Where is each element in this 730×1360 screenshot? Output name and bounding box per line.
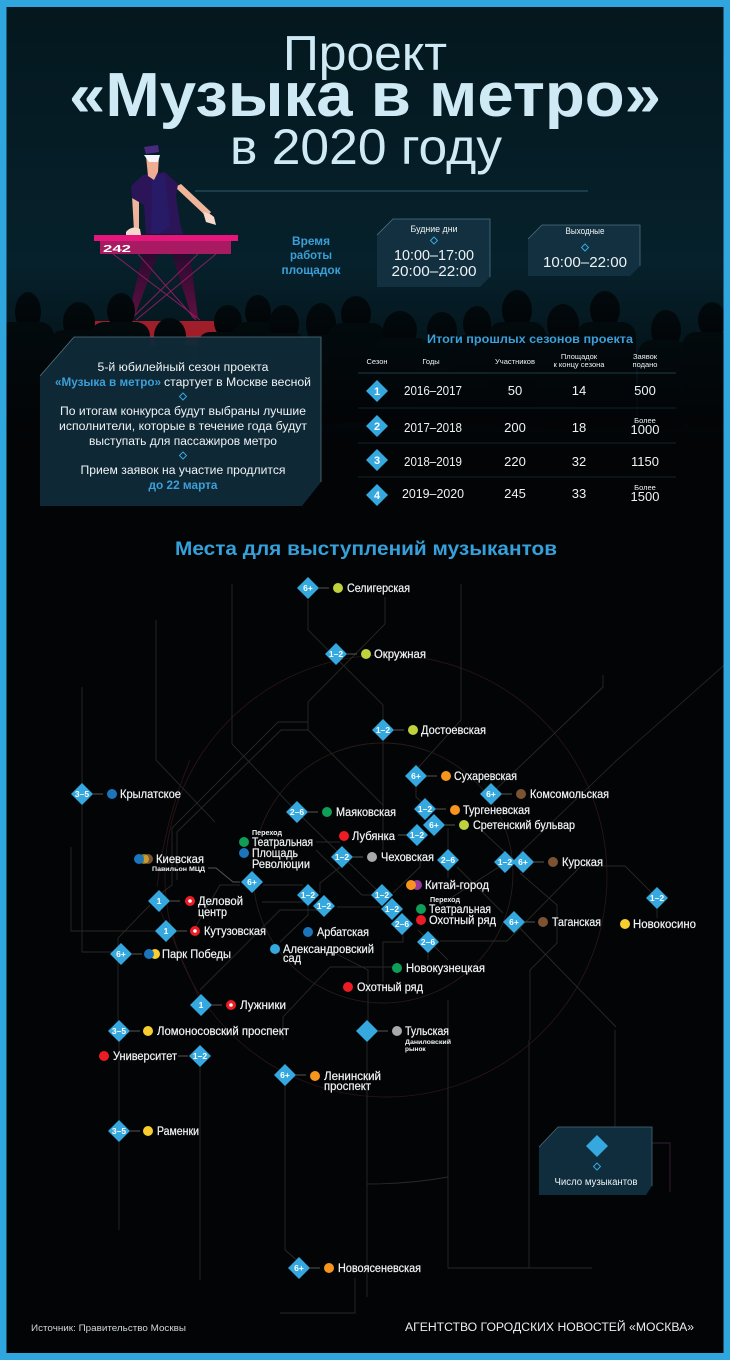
table row 1 [366,380,656,402]
station: Тульская [356,1020,451,1053]
station: Новокузнецкая: 2–6 [421,937,435,947]
station: Парк Победы: 6+ [116,949,126,959]
station: Арбатская: 1–2 [301,890,315,900]
station: Тульская: Тульская [405,1026,449,1038]
metro map background lines [71,584,730,1313]
station: Чеховская: Чеховская [381,852,434,864]
station: Сухаревская: 6+ [411,771,421,781]
table row 2: 2 [374,421,380,433]
station: Киевская: Павильон МЦД [152,866,205,873]
station: Маяковская [286,801,396,823]
panel: project description: исполнители, которые в течение года будут [59,421,308,433]
table row 3: 220 [504,454,526,469]
station: Лубянка [339,824,428,846]
station: Селигерская: Селигерская [347,583,410,595]
station: Комсомольская: 6+ [486,789,496,799]
panel: project description: 5-й юбилейный сезон проекта [98,362,269,374]
station: Ленинский проспект [274,1064,381,1093]
station: Крылатское: 3–5 [75,789,89,799]
heading: venues: Места для выступлений музыкантов [175,538,557,560]
panel: project description: выступать для пассажиров метро [89,436,277,448]
table row 2: Более [634,416,656,425]
legend panel: number of musicians [539,1127,652,1195]
station: Тульская: Даниловский [405,1038,451,1046]
table column headers: подано [633,360,657,369]
station: Парк Победы [110,943,231,965]
table row 2: 200 [504,420,526,435]
station: Университет: Университет [113,1051,178,1063]
station: Кутузовская: Кутузовская [204,926,266,938]
station: Театральная / Охотный ряд (east group): 1–2 [375,890,389,900]
station: Ломоносовский проспект: 3–5 [112,1026,126,1036]
station: Тургеневская [414,798,530,820]
station: Деловой центр: 1 [157,896,162,906]
table column headers: Площадок [561,352,598,361]
table row 4: 245 [504,486,526,501]
station: Курская: Курская [562,857,603,869]
station: Окружная: Окружная [374,649,426,661]
table heading: Итоги прошлых сезонов проекта [427,334,634,346]
table column headers: Заявок [633,352,658,361]
panel: project description: «Музыка в метро» [55,377,161,389]
title: Проект [283,27,447,81]
station: Новоясеневская: Новоясеневская [338,1263,421,1275]
source: Источник: Правительство Москвы [31,1323,186,1334]
station: Достоевская: 1–2 [376,725,390,735]
station: Крылатское: Крылатское [120,789,181,801]
station: Маяковская: Маяковская [336,807,396,819]
panel: weekdays hours [377,219,490,287]
table column headers: Участников [495,357,535,366]
title: в 2020 году [230,119,502,175]
station: Раменки: 3–5 [112,1126,126,1136]
station: Университет [99,1045,211,1067]
station: Театральная / Площадь Революции: Переход [252,830,283,837]
station: Кутузовская [155,920,266,942]
station: Александровский сад [270,944,374,965]
station: Селигерская [297,577,410,599]
station: Театральная / Охотный ряд (east group): Переход [430,897,461,904]
table row 4: 33 [572,486,586,501]
station: Китай-город: 2–6 [441,855,455,865]
table row 4: 1500 [631,489,659,504]
table row 2 [366,415,659,437]
station: Китай-город [406,849,489,892]
station: Театральная / Площадь Революции [239,830,313,871]
panel: project description: По итогам конкурса будут выбраны лучшие [60,406,306,418]
table row 1: 50 [508,383,522,398]
table row 3: 2018–2019 [404,454,462,469]
table column headers: к концу сезона [554,360,605,369]
station: Таганская: 6+ [509,917,519,927]
station: Курская: 6+ [518,857,528,867]
table row 2: 2017–2018 [404,420,462,435]
station: Сретенский бульвар: 6+ [429,820,439,830]
table row 1: 14 [572,383,586,398]
agency credit: АГЕНТСТВО ГОРОДСКИХ НОВОСТЕЙ «МОСКВА» [405,1321,694,1334]
station: Новокузнецкая: Новокузнецкая [406,963,485,975]
panel: weekdays hours: Будние дни [410,224,458,235]
table row 4: 4 [374,490,381,502]
station: Тургеневская: Тургеневская [463,805,530,817]
station: Таганская [503,911,601,933]
station: Крылатское [71,783,181,805]
station: Театральная / Площадь Революции: Революции [252,859,310,871]
station: Окружная [325,643,426,665]
station: Курская [494,851,603,873]
station: Лужники [190,994,286,1016]
illustration: musician at keyboard: 242 [103,244,132,255]
illustration: stage [90,321,252,345]
working hours label: работы [290,250,332,262]
station: Ломоносовский проспект: Ломоносовский проспект [157,1026,290,1038]
station: Курская: 1–2 [498,857,512,867]
working hours label [282,236,341,277]
table row 1: 2016–2017 [404,383,462,398]
legend panel: number of musicians: Число музыкантов [554,1177,638,1188]
panel: weekend hours [528,225,640,276]
table row 1: 1 [374,386,380,398]
panel: project description [40,337,321,506]
title: «Музыка в метро» [69,61,661,130]
station: Киевская: Киевская [156,854,204,866]
table row 2: 18 [572,420,586,435]
station: Новокузнецкая [392,931,485,975]
station: Театральная / Охотный ряд (east group): Театральная [429,904,491,916]
station: Тульская: рынок [405,1046,426,1053]
station: Сухаревская [405,765,517,787]
station: Киевская: 6+ [247,877,257,887]
table row 3: 32 [572,454,586,469]
panel: project description: до 22 марта [148,480,218,492]
table row 3 [366,449,659,471]
station: Комсомольская [480,783,609,805]
station: Александровский сад: Александровский [283,944,374,956]
station: Сухаревская: Сухаревская [454,771,517,783]
table row 4 [366,483,659,506]
station: Киевская [134,854,263,893]
working hours label: Время [292,236,330,248]
table column headers: Сезон [366,357,388,366]
table: past seasons [358,334,676,506]
station: Арбатская: Арбатская [317,927,369,939]
station: Новокосино [620,887,696,931]
station: Раменки [108,1120,199,1142]
station: Новоясеневская [288,1257,421,1279]
station: Таганская: Таганская [552,917,601,929]
station: Театральная / Охотный ряд (east group): Охотный ряд [429,915,496,927]
station: Раменки: Раменки [157,1126,199,1138]
station: Театральная / Площадь Революции: Театральная [252,837,313,849]
panel: project description: Прием заявок на участие продлится [80,465,286,477]
station: Новокосино: Новокосино [633,919,696,931]
panel: weekdays hours: 10:00–17:00 [394,248,474,264]
station: Селигерская: 6+ [303,583,313,593]
station: Ломоносовский проспект [108,1020,290,1042]
station: Университет: 1–2 [193,1051,207,1061]
station: Тургеневская: 1–2 [418,804,432,814]
station: Лужники: 1 [199,1000,204,1010]
station: Новоясеневская: 6+ [294,1263,304,1273]
panel: project description: стартует в Москве весной [164,377,311,389]
station: Лубянка: 1–2 [410,830,424,840]
station: Чеховская: 1–2 [335,852,349,862]
station: Деловой центр [148,890,243,919]
panel: weekend hours: 10:00–22:00 [543,255,627,271]
table row 1: 500 [634,383,656,398]
table row 4: Более [634,483,656,492]
station: Театральная / Охотный ряд (east group) [371,884,496,935]
station: Кутузовская: 1 [164,926,169,936]
station: Китай-город: Китай-город [425,880,489,892]
station: Новокосино: 1–2 [650,893,664,903]
station: Комсомольская: Комсомольская [530,789,609,801]
station: Лужники: Лужники [240,1000,286,1012]
station: Арбатская [297,884,369,939]
station: Достоевская: Достоевская [421,725,486,737]
station: Чеховская [331,846,434,868]
table row 4: 2019–2020 [402,486,464,501]
station: Театральная / Площадь Революции: Площадь [252,848,298,860]
table row 3: 1150 [631,454,659,469]
station: Театральная / Охотный ряд (east group): 2–6 [395,919,409,929]
table row 3: 3 [374,455,380,467]
working hours label: площадок [282,265,341,277]
table column headers [366,352,658,369]
station: Арбатская: 1–2 [317,901,331,911]
panel: weekdays hours: 20:00–22:00 [392,264,476,280]
station: Охотный ряд: Охотный ряд [357,982,423,994]
panel: weekend hours: Выходные [566,226,604,237]
illustration: musician at keyboard [94,145,238,320]
station: Окружная: 1–2 [329,649,343,659]
table column headers: Годы [422,357,440,366]
crowd silhouettes [0,290,730,434]
table row 2: 1000 [631,422,659,437]
station: Театральная / Охотный ряд (east group): 1–2 [385,904,399,914]
station: Деловой центр: центр [198,907,227,919]
station: Сретенский бульвар [423,814,575,836]
station: Ленинский проспект: проспект [324,1081,372,1093]
title [69,27,661,175]
station: Ленинский проспект: 6+ [280,1070,290,1080]
station: Сретенский бульвар: Сретенский бульвар [473,820,575,832]
station: Достоевская [372,719,486,741]
station: Парк Победы: Парк Победы [162,949,231,961]
station: Лубянка: Лубянка [352,831,396,843]
station: Ленинский проспект: Ленинский [324,1071,381,1083]
station: Маяковская: 2–6 [290,807,304,817]
station: Александровский сад: сад [283,953,301,965]
station: Деловой центр: Деловой [198,896,243,908]
